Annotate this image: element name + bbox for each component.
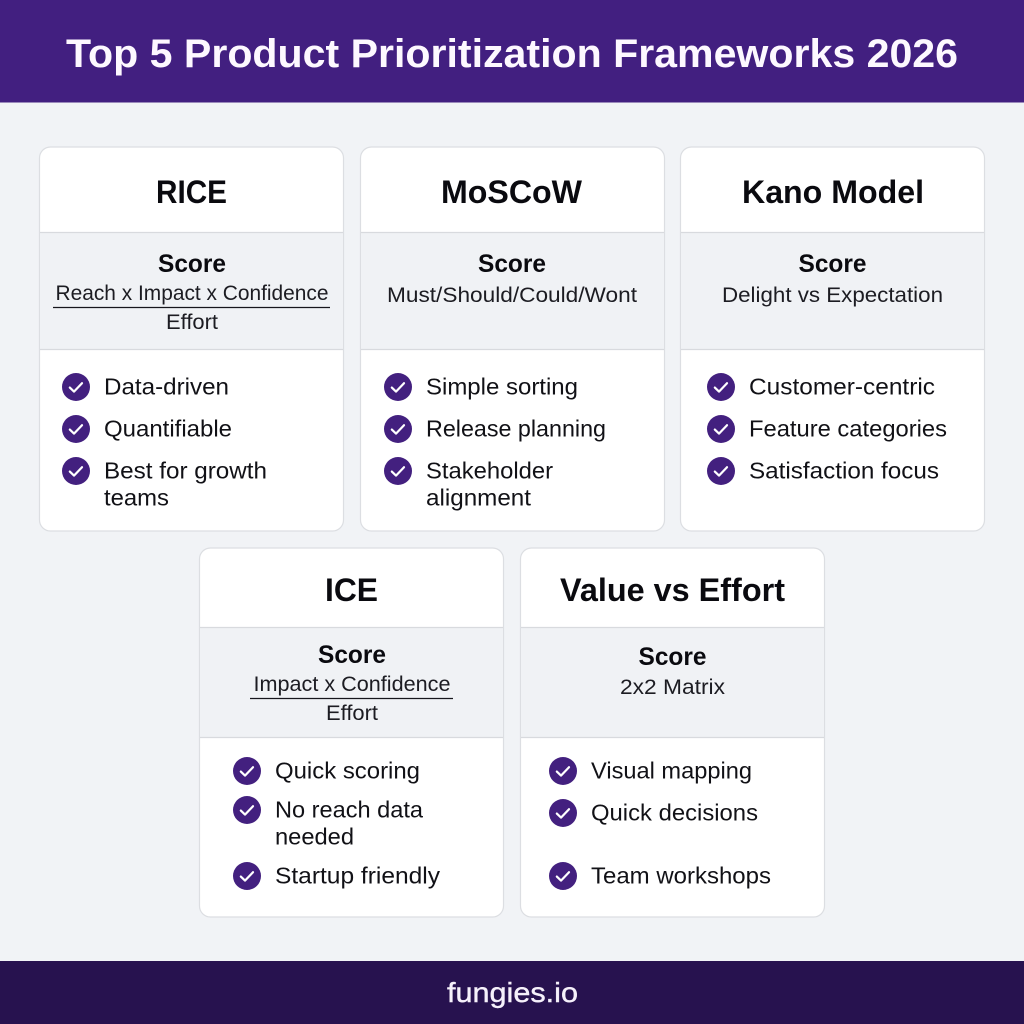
score formula: ICE — [250, 641, 453, 725]
score formula: MoSCoW — [387, 250, 637, 307]
score formula: Value vs Effort: 2x2 Matrix — [620, 675, 725, 699]
benefit list: Value vs Effort: Quick decisions — [591, 800, 758, 826]
footer banner — [0, 961, 1024, 1024]
score formula: MoSCoW: Score — [478, 250, 546, 278]
score formula: RICE: Effort — [166, 310, 218, 334]
heading: MoSCoW: MoSCoW — [441, 174, 583, 210]
benefit list: MoSCoW — [384, 373, 606, 510]
benefit list: RICE — [62, 373, 267, 510]
heading: Value vs Effort: Value vs Effort — [560, 572, 785, 608]
score formula: Value vs Effort — [620, 643, 725, 699]
benefit list: ICE: No reach data — [275, 796, 424, 822]
benefit list: MoSCoW: Stakeholder — [426, 458, 553, 484]
score formula: RICE: Score — [158, 250, 226, 278]
benefit list: ICE: Quick scoring — [275, 758, 420, 784]
score formula: ICE: Impact x Confidence — [254, 672, 450, 696]
score formula: Kano Model — [722, 250, 943, 307]
benefit list: Kano Model: Feature categories — [749, 416, 947, 442]
score formula: RICE: Reach x Impact x Confidence — [56, 281, 328, 305]
score formula: RICE — [53, 250, 330, 334]
benefit list: Kano Model: Satisfaction focus — [749, 458, 939, 484]
panel: Kano Model — [680, 147, 984, 531]
score formula: Kano Model: Delight vs Expectation — [722, 283, 943, 307]
score formula: Value vs Effort: Score — [638, 643, 707, 671]
footer brand: fungies.io — [447, 977, 578, 1008]
heading: RICE: RICE — [156, 174, 227, 210]
heading: Kano Model: Kano Model — [742, 174, 924, 210]
panel: RICE — [40, 147, 344, 531]
benefit list: RICE: Quantifiable — [104, 416, 232, 442]
benefit list: ICE — [233, 757, 440, 890]
benefit list: Value vs Effort — [549, 757, 771, 890]
benefit list: Value vs Effort: Visual mapping — [591, 758, 752, 784]
benefit list: RICE: Best for growth — [104, 458, 267, 484]
panel: MoSCoW — [360, 147, 664, 531]
score formula: ICE: Score — [318, 641, 386, 669]
benefit list: MoSCoW: Release planning — [426, 416, 606, 442]
benefit list: Kano Model — [707, 373, 947, 485]
heading: ICE: ICE — [325, 572, 378, 608]
benefit list: ICE: needed — [275, 824, 354, 850]
benefit list: RICE: Data-driven — [104, 374, 229, 400]
benefit list: MoSCoW: alignment — [426, 484, 531, 510]
score formula: Kano Model: Score — [798, 250, 867, 278]
score formula: MoSCoW: Must/Should/Could/Wont — [387, 283, 637, 307]
benefit list: RICE: teams — [104, 484, 169, 510]
benefit list: MoSCoW: Simple sorting — [426, 374, 578, 400]
benefit list: Kano Model: Customer-centric — [749, 374, 935, 400]
benefit list: Value vs Effort: Team workshops — [591, 862, 771, 888]
header banner — [0, 0, 1024, 102]
panel: Value vs Effort — [520, 548, 824, 917]
title: Top 5 Product Prioritization Frameworks 2026 — [66, 32, 958, 76]
benefit list: ICE: Startup friendly — [275, 862, 440, 888]
panel: ICE — [200, 548, 504, 917]
score formula: ICE: Effort — [326, 701, 378, 725]
